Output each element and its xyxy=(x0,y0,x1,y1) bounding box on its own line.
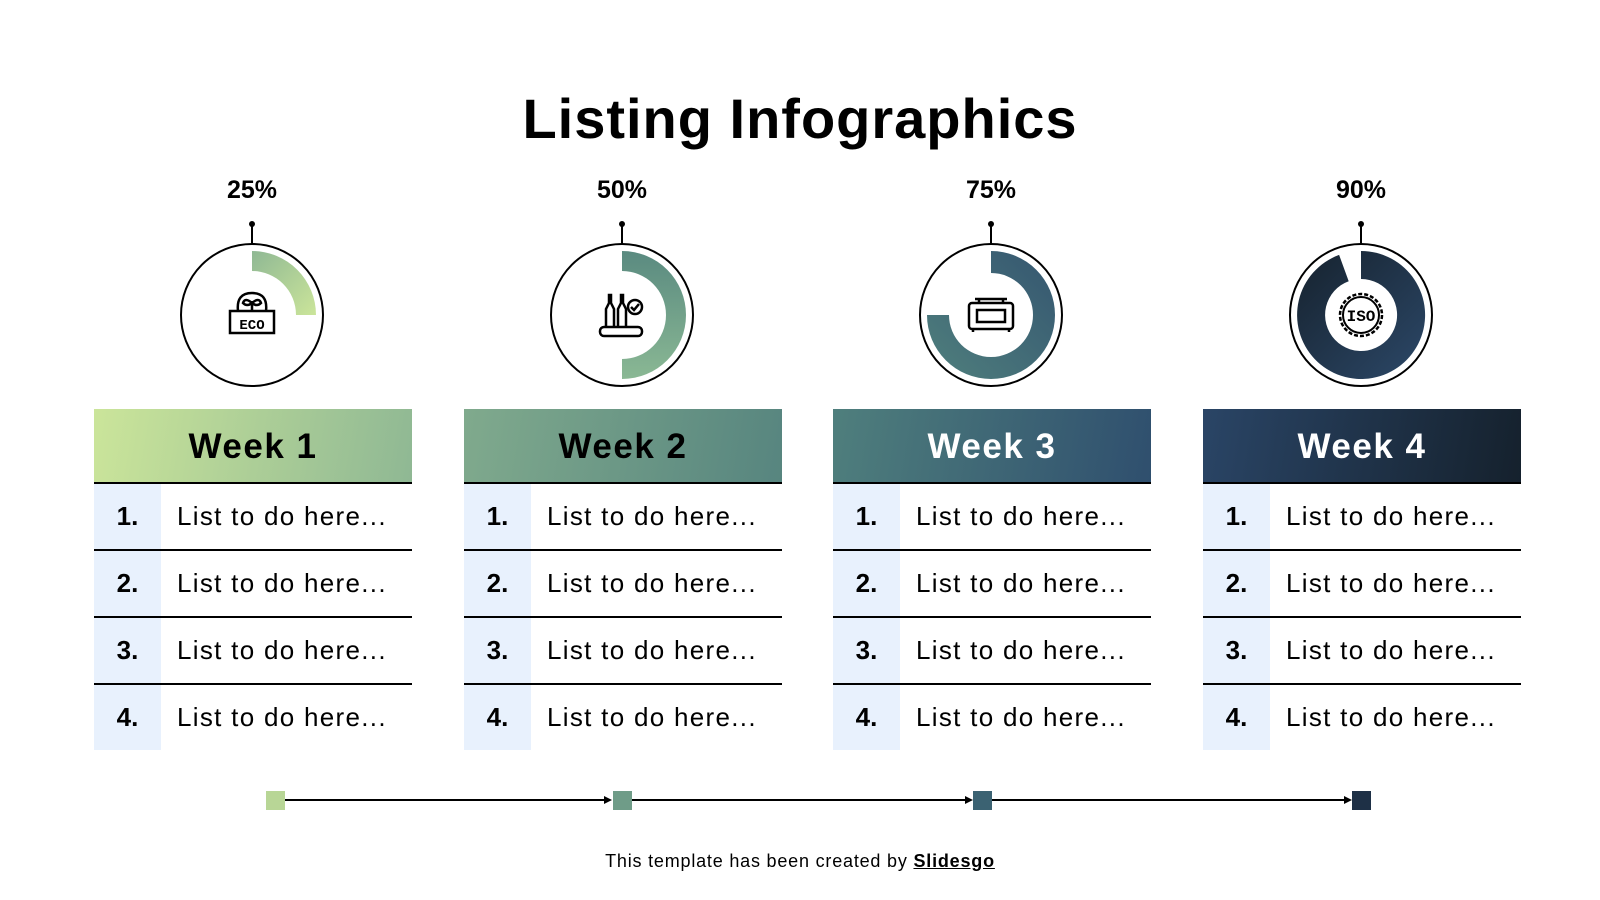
panel: week 2: 1. xyxy=(487,501,508,531)
ring: week 1 25%: 25% xyxy=(227,176,277,204)
timeline markers xyxy=(266,791,1371,810)
ring: week 1 25% xyxy=(181,176,323,386)
panel: week 3: List to do here... xyxy=(916,635,1126,665)
panel: week 1: List to do here... xyxy=(177,702,387,732)
panel: week 1: 4. xyxy=(117,702,138,732)
panel: week 4: List to do here... xyxy=(1286,702,1496,732)
icon: scale xyxy=(969,299,1013,332)
panel: week 4: List to do here... xyxy=(1286,501,1496,531)
panel: week 4: 3. xyxy=(1226,635,1247,665)
panel: week 2: 4. xyxy=(487,702,508,732)
panel: week 2: List to do here... xyxy=(547,702,757,732)
icon: eco bag xyxy=(230,293,274,333)
panel: week 4: List to do here... xyxy=(1286,568,1496,598)
panel: week 4 xyxy=(1203,409,1521,750)
panel: week 4: 2. xyxy=(1226,568,1247,598)
icon: bottles xyxy=(600,295,642,336)
panel: week 2: List to do here... xyxy=(547,568,757,598)
panel: week 3: 4. xyxy=(856,702,877,732)
panel: week 3: 3. xyxy=(856,635,877,665)
heading: week 1 xyxy=(94,409,412,484)
panel: week 1: List to do here... xyxy=(177,635,387,665)
ring: week 3 75%: 75% xyxy=(966,176,1016,204)
panel: week 1 xyxy=(94,409,412,750)
panel: week 4: List to do here... xyxy=(1286,635,1496,665)
panel: week 3: List to do here... xyxy=(916,501,1126,531)
title: Listing Infographics xyxy=(522,87,1078,150)
panel: week 2: 3. xyxy=(487,635,508,665)
heading: week 3 xyxy=(833,409,1151,484)
panel: week 3 xyxy=(833,409,1151,750)
panel: week 3: List to do here... xyxy=(916,702,1126,732)
panel: week 2: List to do here... xyxy=(547,635,757,665)
ring: week 2 50%: 50% xyxy=(597,176,647,204)
footer credit: This template has been created by Slidesgo xyxy=(605,851,995,871)
panel: week 2 xyxy=(464,409,782,750)
ring: week 4 90% xyxy=(1290,176,1432,386)
ring: week 4 90%: 90% xyxy=(1336,176,1386,204)
panel: week 2: 2. xyxy=(487,568,508,598)
heading: week 3: Week 3 xyxy=(928,426,1056,466)
heading: week 4 xyxy=(1203,409,1521,484)
heading: week 2: Week 2 xyxy=(558,426,688,466)
panel: week 1: List to do here... xyxy=(177,568,387,598)
panel: week 3: 2. xyxy=(856,568,877,598)
ring: week 1 25%: ECO xyxy=(239,318,265,334)
panel: week 1: 2. xyxy=(117,568,138,598)
panel: week 3: List to do here... xyxy=(916,568,1126,598)
ring: week 2 50% xyxy=(551,176,693,386)
heading: week 2 xyxy=(464,409,782,484)
panel: week 1: 3. xyxy=(117,635,138,665)
ring: week 3 75% xyxy=(920,176,1062,386)
icon: ISO badge xyxy=(1340,294,1382,336)
heading: week 1: Week 1 xyxy=(188,426,318,466)
panel: week 1: List to do here... xyxy=(177,501,387,531)
panel: week 1: 1. xyxy=(117,501,138,531)
panel: week 4: 4. xyxy=(1226,702,1247,732)
icon: ISO badge: ISO xyxy=(1347,308,1376,326)
heading: week 4: Week 4 xyxy=(1298,426,1426,466)
panel: week 4: 1. xyxy=(1226,501,1247,531)
panel: week 2: List to do here... xyxy=(547,501,757,531)
timeline arrows xyxy=(284,799,1345,801)
panel: week 3: 1. xyxy=(856,501,877,531)
